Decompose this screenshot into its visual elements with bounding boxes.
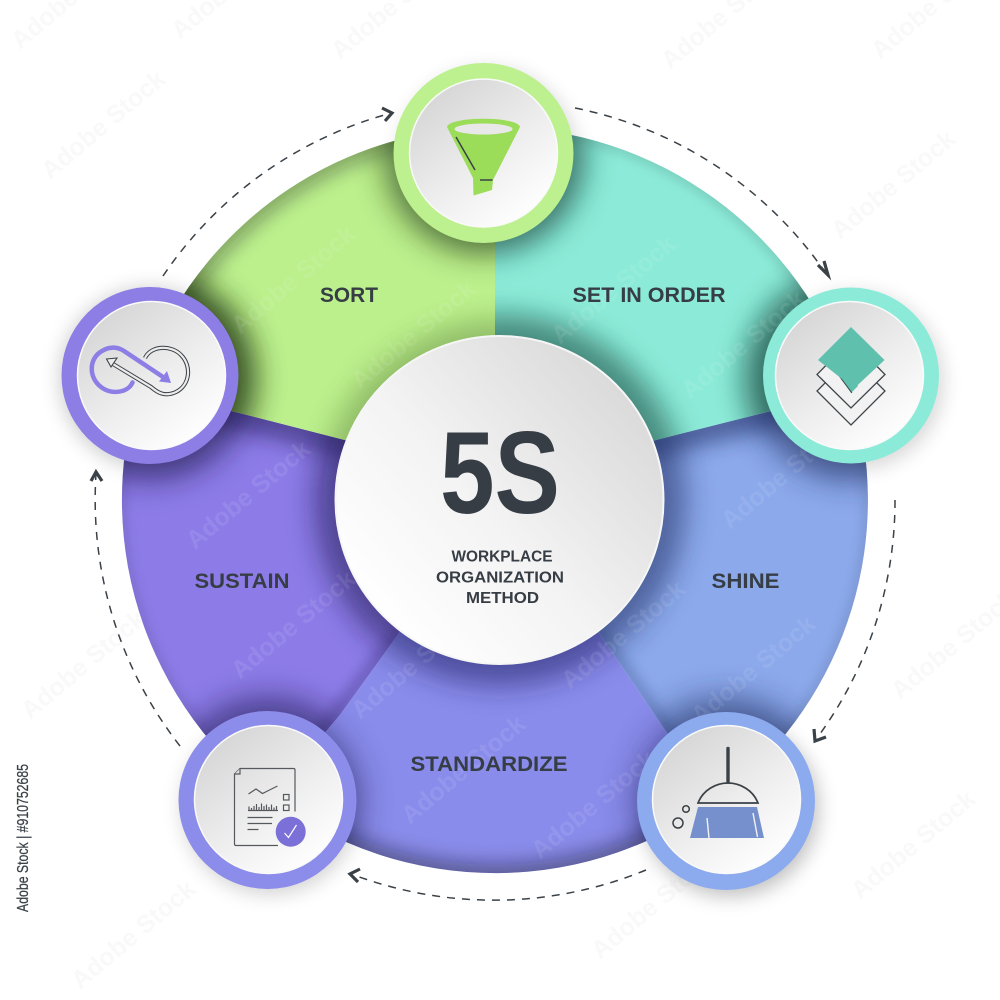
segment watermarks: Adobe Stock [716, 415, 851, 535]
center hub [336, 336, 664, 664]
segment watermarks: Adobe Stock [226, 220, 361, 340]
dashed arrow: sort to set in order [575, 108, 828, 275]
dashed arrow: set in order to shine [814, 500, 895, 741]
segment watermarks: Adobe Stock [226, 565, 361, 685]
label: sustain: SUSTAIN [194, 570, 290, 593]
label: set in order: SET IN ORDER [572, 284, 726, 307]
label: standardize: STANDARDIZE [410, 753, 568, 776]
icon: broom [673, 748, 764, 838]
node: shine broom [637, 712, 818, 896]
background watermarks on white: Adobe Stock [16, 605, 151, 725]
segment: shine [598, 411, 868, 734]
center subtitle: METHOD [466, 590, 539, 607]
label: shine: SHINE [712, 570, 780, 593]
icon: report with check [234, 768, 306, 847]
segment: sort [184, 140, 495, 440]
segment: set in order [495, 135, 809, 440]
label: sort: SORT [320, 284, 378, 307]
center subtitle: ORGANIZATION [436, 570, 564, 586]
icon: funnel [447, 119, 520, 196]
segment: standardize [325, 632, 668, 874]
icon: infinity arrows [92, 348, 188, 394]
segment watermarks: Adobe Stock [676, 285, 811, 405]
segment watermarks: Adobe Stock [556, 575, 691, 695]
dashed arrow: sustain to sort [163, 108, 392, 276]
segment watermarks: Adobe Stock [526, 745, 661, 865]
background watermarks on white: Adobe Stock [826, 125, 961, 245]
dashed arrow: shine to standardize [350, 869, 646, 900]
segment watermarks: Adobe Stock [546, 230, 681, 350]
background watermarks on white: Adobe Stock [846, 785, 981, 905]
segment watermarks: Adobe Stock [686, 610, 821, 730]
background watermarks on white: Adobe Stock [36, 65, 171, 185]
node: standardize report [178, 711, 358, 894]
segment: sustain [122, 411, 400, 736]
segment watermarks: Adobe Stock [396, 710, 531, 830]
segment watermarks [181, 220, 851, 865]
node: sort funnel [394, 63, 577, 247]
node: set in order layers [763, 288, 943, 469]
center subtitle: WORKPLACE [452, 548, 553, 566]
segment watermarks: Adobe Stock [181, 435, 316, 555]
background watermarks on white: Adobe Stock [586, 845, 721, 965]
dashed arrow: standardize to sustain [91, 472, 180, 746]
node: sustain infinity [60, 287, 240, 468]
icon: stacked layers [817, 327, 885, 425]
center title 5S: 5S [440, 407, 560, 538]
segment watermarks: Adobe Stock [346, 275, 481, 395]
stock id credit: Adobe Stock | #910752685 [15, 764, 32, 912]
segment watermarks: Adobe Stock [346, 605, 481, 725]
background watermarks on white: Adobe Stock [66, 875, 201, 995]
center subtitle [436, 548, 564, 607]
